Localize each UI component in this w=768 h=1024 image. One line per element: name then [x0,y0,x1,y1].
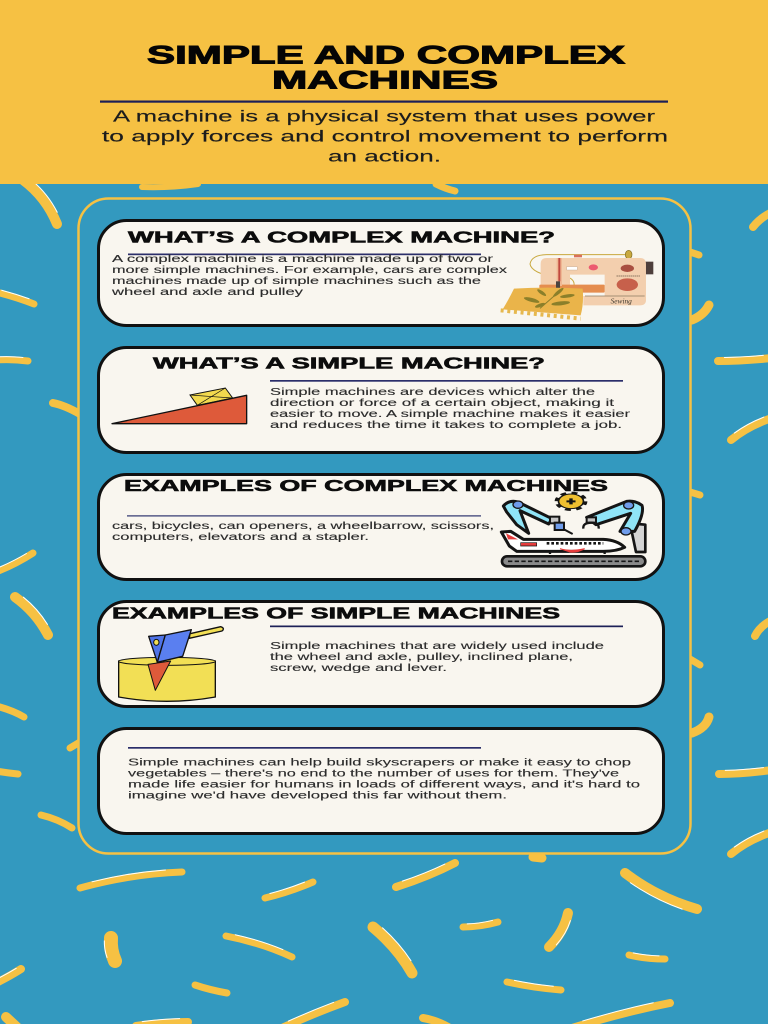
text: closing note: vegetables – there's no end to the number of uses for them. They've [128,769,620,780]
text: simple machine definition: Simple machines are devices which alter the [270,387,596,398]
title: MACHINES [272,66,498,94]
title: SIMPLE AND COMPLEX [147,42,626,70]
text: closing note: Simple machines can help build skyscrapers or make it easy to chop [128,758,632,769]
subtitle: to apply forces and control movement to perform [102,129,668,146]
text: complex examples: cars, bicycles, can openers, a wheelbarrow, scissors, [112,521,494,532]
text: simple examples: Simple machines that are widely used include [270,641,605,652]
subtitle [102,109,668,166]
text: simple machine definition: easier to move. A simple machine makes it easier [270,409,631,420]
text: simple examples: screw, wedge and lever. [270,663,447,674]
panel: what's a simple machine [98,348,664,452]
panel: examples of complex machines [98,474,664,580]
text: simple machine definition: and reduces the time it takes to complete a job. [270,420,622,431]
text: complex machine definition: A complex machine is a machine made up of two or [112,254,494,265]
icon: robot arms building a plane [501,494,645,566]
text: closing note: imagine we'd have developed this far without them. [128,791,507,802]
text: complex machine definition: machines made up of simple machines such as the [112,276,482,287]
text: complex examples: computers, elevators and a stapler. [112,532,369,543]
outer panel outline [78,198,690,854]
text: simple examples [270,641,605,674]
header band [0,0,768,184]
text: complex machine definition [110,254,507,298]
subtitle: an action. [328,149,441,166]
icon: sewing machine: Sewing [611,296,632,305]
panel: closing note [98,728,664,834]
heading: examples of simple machines: EXAMPLES OF SIMPLE MACHINES [112,605,561,622]
panel: what's a complex machine [98,220,664,326]
subtitle: A machine is a physical system that uses power [113,109,656,126]
text: complex examples [112,521,494,543]
text: simple examples: the wheel and axle, pulley, inclined plane, [270,652,573,663]
icon: axe splitting a log with wedge [119,627,223,701]
text: simple machine definition: direction or force of a certain object, making it [270,398,614,409]
panel: examples of simple machines [98,602,664,706]
heading: examples of complex machines: EXAMPLES OF COMPLEX MACHINES [124,478,609,495]
icon: inclined plane with block [112,388,247,424]
heading: complex machine: WHAT’S A COMPLEX MACHINE? [128,230,555,247]
heading: simple machine: WHAT’S A SIMPLE MACHINE? [153,356,545,373]
text: closing note [128,758,641,802]
text: complex machine definition: wheel and axle and pulley [110,287,303,298]
icon: sewing machine [501,250,653,319]
text: complex machine definition: more simple machines. For example, cars are complex [112,265,507,276]
text: simple machine definition [270,387,631,431]
title [147,42,626,94]
text: closing note: made life easier for humans in loads of different ways, and it's hard to [128,780,641,791]
